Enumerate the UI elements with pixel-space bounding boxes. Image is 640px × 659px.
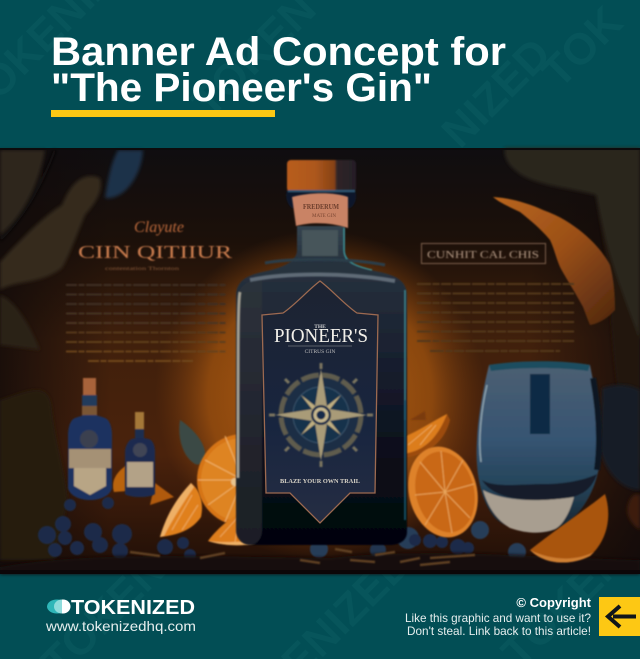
hero gin bottle — [236, 160, 407, 545]
right heading box: CUNHIT CAL CHIS — [427, 249, 539, 261]
ground debris — [0, 553, 640, 574]
bottle label — [262, 281, 378, 523]
bottle label: BLAZE YOUR OWN TRAIL — [280, 478, 361, 485]
watermark pattern: TOK — [532, 0, 632, 97]
blue leaf — [105, 150, 143, 198]
small bottle left — [68, 378, 112, 500]
bottle label: THE — [314, 324, 326, 330]
front orange wedge — [208, 512, 275, 545]
left heading: contentation Thornton — [105, 266, 179, 272]
right orange wedge — [530, 494, 608, 563]
glass highlights — [238, 228, 405, 520]
neck label — [292, 193, 348, 228]
right half orange — [399, 439, 487, 545]
left heading — [78, 219, 232, 272]
title: "The Pioneer's Gin" — [51, 66, 432, 110]
banner ad image — [0, 148, 640, 574]
header band — [0, 0, 640, 148]
top and bottom image edges — [0, 148, 640, 150]
neck label: FREDERUM — [303, 203, 339, 211]
copyright notice: Don't steal. Link back to this article! — [407, 624, 591, 638]
orange leaf — [493, 197, 615, 325]
watermark pattern: NIZED — [432, 29, 560, 157]
compass emblem — [269, 363, 373, 467]
left orange wedge — [160, 483, 202, 537]
copyright notice — [405, 595, 592, 638]
bottle label: CITRUS GIN — [305, 349, 335, 355]
title underline — [51, 110, 275, 117]
copyright notice: Like this graphic and want to use it? — [405, 611, 591, 625]
title: Banner Ad Concept for — [51, 30, 506, 74]
right paragraph — [417, 284, 574, 351]
right upper wedge — [402, 411, 450, 458]
bottle label: PIONEER'S — [274, 325, 368, 347]
bottle shoulders and body — [236, 226, 407, 545]
logo: TOKENIZED — [71, 597, 195, 619]
left heading: Clayute — [134, 219, 184, 236]
left heading: CIIN QITIIUR — [78, 242, 232, 262]
icon: arrow button — [599, 597, 640, 636]
bottle cap — [286, 160, 356, 208]
footer band — [0, 574, 640, 659]
small bottle right — [125, 412, 155, 497]
website url: www.tokenizedhq.com — [45, 618, 196, 634]
blueberries — [38, 497, 526, 561]
left half orange — [197, 434, 289, 526]
background orange slices behind small bottles — [113, 463, 174, 505]
cocktail glass — [477, 361, 600, 533]
right heading box — [422, 244, 546, 264]
left paragraph — [66, 285, 226, 361]
left foliage — [0, 150, 101, 560]
copyright notice: © Copyright — [516, 595, 592, 610]
right foliage — [505, 148, 640, 470]
logo icon — [47, 600, 70, 614]
leaf near left orange — [179, 420, 205, 464]
plum at right — [600, 385, 640, 490]
title — [51, 30, 506, 110]
neck label: MATE GIN — [312, 214, 336, 219]
